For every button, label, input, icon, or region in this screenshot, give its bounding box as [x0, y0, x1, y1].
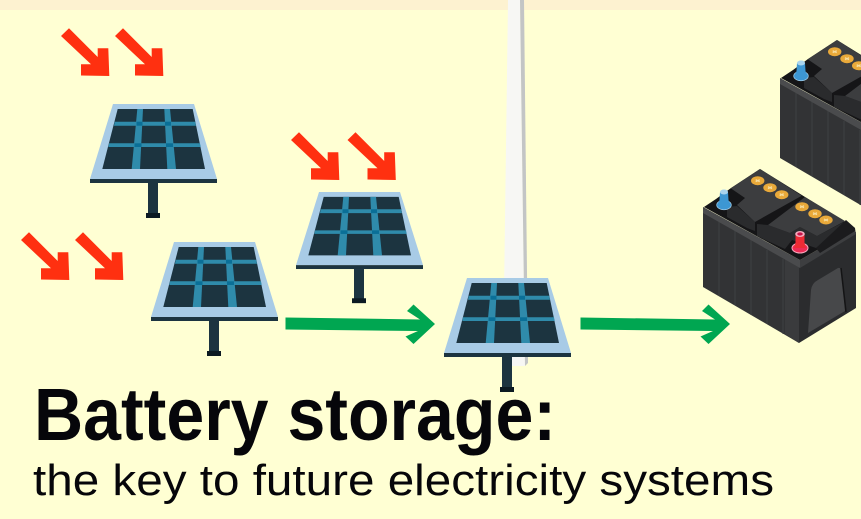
- battery: back: [780, 40, 861, 214]
- solar panel: middle: [151, 242, 278, 356]
- sun arrows: middle group: [291, 132, 396, 180]
- subtitle: the key to future electricity systems: [33, 456, 774, 505]
- wind turbine tower: [503, 0, 528, 366]
- sun arrows: top group: [61, 28, 163, 76]
- sun arrows: left group: [21, 232, 123, 280]
- top band: [0, 0, 861, 10]
- solar panel: upper right: [296, 192, 423, 303]
- arrow: central panel to batteries: [580, 304, 730, 344]
- arrow: panels to central panel: [286, 304, 435, 344]
- title: Battery storage:: [34, 373, 556, 456]
- solar panel: in front of turbine: [444, 278, 571, 392]
- battery: front: [703, 169, 856, 343]
- solar panel: top left: [90, 104, 217, 218]
